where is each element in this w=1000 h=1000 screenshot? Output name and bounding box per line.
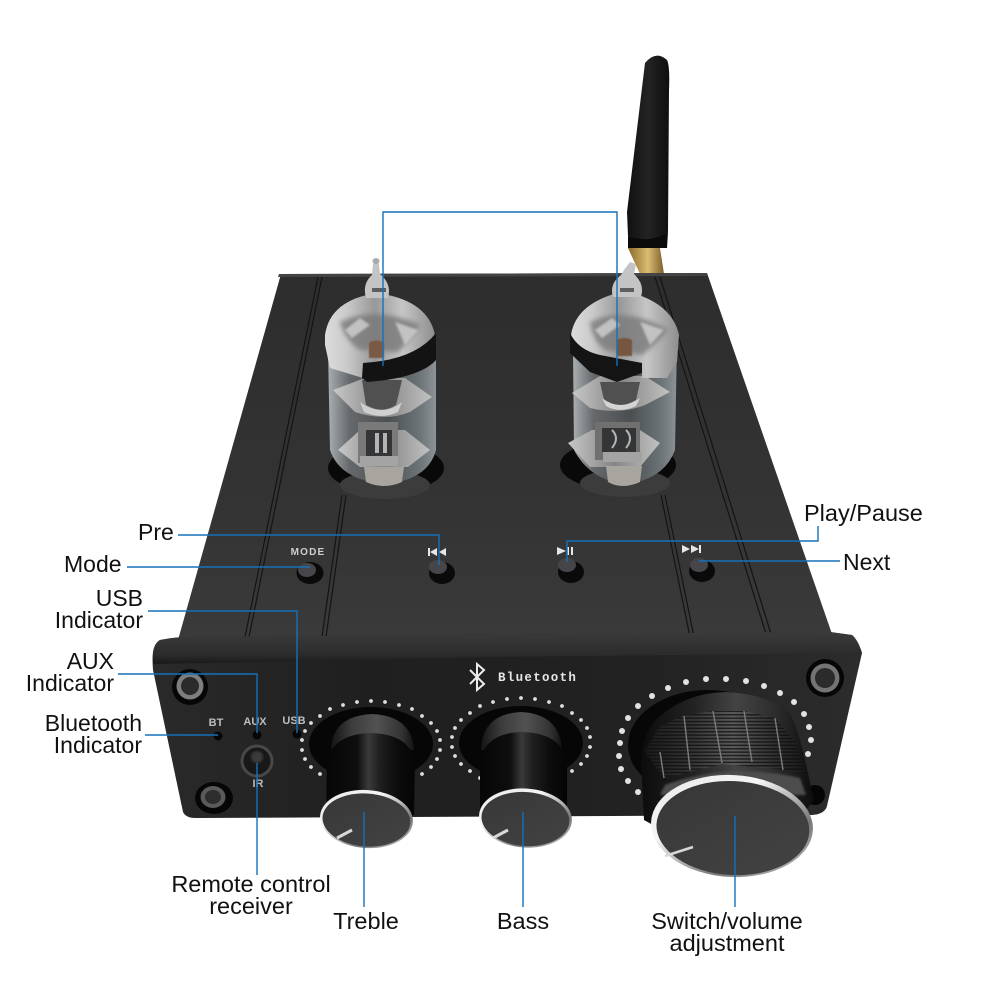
lower lens plate: [338, 430, 430, 467]
label: Remote control receiver: [171, 871, 331, 919]
text: MODE: MODE: [291, 547, 325, 558]
label: Remote control receiver: Remote control: [171, 871, 331, 897]
lower grid box: [358, 422, 398, 466]
text: Bluetooth: Bluetooth: [498, 671, 577, 685]
label: Pre: Pre: [138, 519, 174, 545]
icon: right vacuum tube: [568, 262, 679, 486]
callout lines: [118, 212, 840, 907]
button: next: [689, 558, 715, 582]
indicator labels: IR: [252, 778, 264, 790]
panel: top control buttons: [291, 545, 715, 584]
lower lens plate: [568, 430, 660, 467]
icon: bottom-left bolt: [195, 782, 233, 814]
icon: left vacuum tube: [325, 258, 436, 486]
indicator labels: AUX: [243, 716, 267, 728]
dial dots: bass: [450, 696, 592, 780]
lower grid box: [595, 422, 642, 462]
icon: top-right bolt: [806, 659, 844, 697]
knob: bass: [459, 706, 583, 851]
knob: switch/volume: [628, 690, 816, 881]
icon: play pause: [557, 547, 573, 555]
chrome dome: [325, 293, 435, 378]
dial dots: treble: [300, 699, 442, 783]
chrome dome: [571, 291, 679, 378]
label: Play/Pause: Play/Pause: [804, 500, 923, 526]
icon: antenna: [627, 56, 669, 274]
button: mode: [296, 562, 324, 584]
label: USB Indicator: USB: [96, 585, 143, 611]
label: Switch/volume adjustment: Switch/volume: [651, 908, 803, 934]
indicator labels: BT: [209, 717, 224, 729]
panel: vacuum tube sockets: [328, 440, 676, 499]
icon: bottom-right bolt: [805, 785, 825, 805]
label: Treble: Treble: [333, 908, 399, 934]
indicator labels: USB: [282, 715, 306, 727]
label: Bluetooth Indicator: Indicator: [54, 732, 142, 758]
label: Next: Next: [843, 549, 891, 575]
label: Switch/volume adjustment: adjustment: [670, 930, 785, 956]
icon: previous: [428, 548, 446, 556]
dial dots: volume: [616, 676, 814, 795]
panel: amplifier top plate: [178, 273, 832, 640]
label: Bass: Bass: [497, 908, 549, 934]
icon: bluetooth symbol: [470, 664, 484, 690]
button: play: [558, 558, 584, 583]
upper lens plate: [572, 376, 670, 411]
icon: next: [682, 545, 701, 553]
label: Mode: Mode: [64, 551, 122, 577]
label: AUX Indicator: Indicator: [26, 670, 114, 696]
label: Remote control receiver: receiver: [209, 893, 293, 919]
knurled grip: [645, 711, 805, 778]
label: AUX Indicator: AUX: [67, 648, 114, 674]
label: Bluetooth Indicator: Bluetooth: [45, 710, 142, 736]
upper lens plate: [333, 378, 432, 417]
indicator LEDs: [214, 730, 302, 740]
button: previous: [429, 560, 455, 584]
label: AUX Indicator: [26, 648, 114, 696]
panel: front face: [153, 632, 862, 818]
label: Switch/volume adjustment: [651, 908, 803, 956]
label: USB Indicator: Indicator: [55, 607, 143, 633]
label: USB Indicator: [55, 585, 143, 633]
label: Bluetooth Indicator: [45, 710, 142, 758]
knob: treble: [309, 707, 433, 851]
indicator labels: [209, 715, 306, 790]
icon: top-left bolt: [172, 669, 208, 705]
icon: IR receiver: [240, 744, 274, 778]
